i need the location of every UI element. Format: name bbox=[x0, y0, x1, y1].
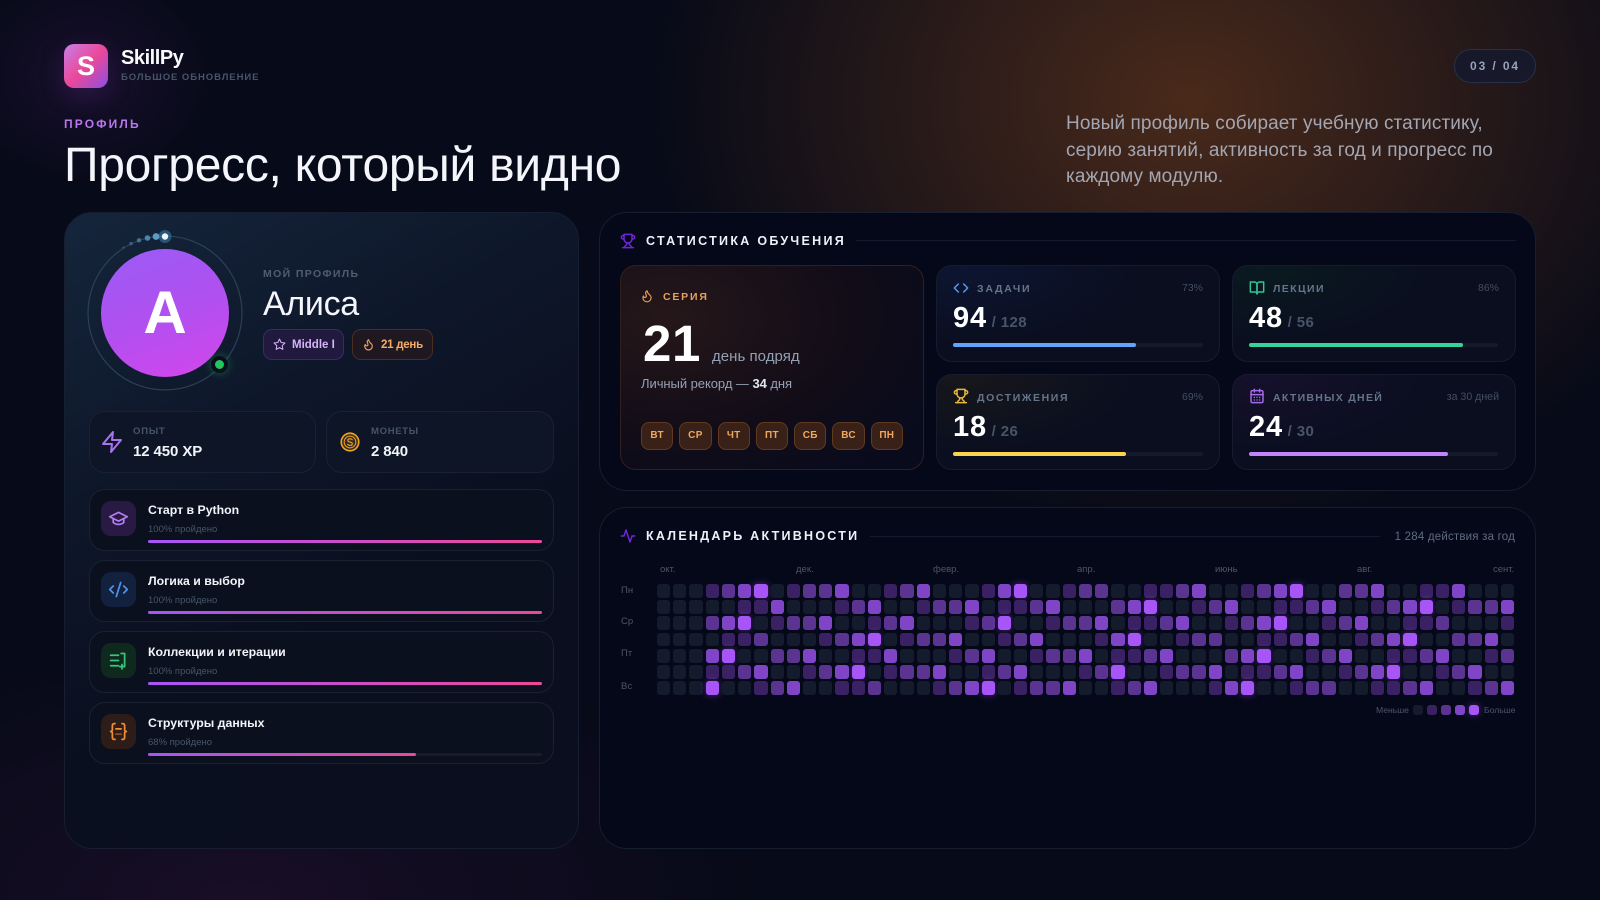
orbit ring and dots bbox=[88, 230, 242, 391]
status dot bbox=[211, 356, 228, 373]
weekday labels: Пн bbox=[621, 585, 633, 596]
icon: bolt bbox=[102, 431, 122, 453]
panel: activity calendar bbox=[599, 507, 1536, 849]
icon: trophy bbox=[954, 388, 968, 404]
logo bbox=[60, 44, 259, 100]
module title: Коллекции и итерации bbox=[148, 645, 286, 659]
badge: level bbox=[263, 329, 344, 360]
description: каждому модулю. bbox=[1066, 166, 1223, 187]
lectures value: 48 / 56 bbox=[1249, 302, 1314, 334]
month labels: дек. bbox=[796, 564, 814, 575]
day chips: ПН bbox=[879, 430, 894, 441]
icon: coin bbox=[340, 432, 360, 452]
section heading: КАЛЕНДАРЬ АКТИВНОСТИ bbox=[646, 529, 859, 543]
icon: activity bbox=[620, 529, 636, 543]
module progress text: 100% пройдено bbox=[148, 524, 217, 535]
experience value: 12 450 XP bbox=[133, 443, 202, 460]
icon: logo mark bbox=[64, 44, 108, 88]
page counter bbox=[1454, 49, 1536, 83]
stat: coins bbox=[326, 411, 554, 473]
month labels: июнь bbox=[1215, 564, 1238, 575]
personal record: Личный рекорд — 34 дня bbox=[641, 376, 792, 391]
page counter: 03 / 04 bbox=[1470, 59, 1520, 73]
module: data structures bbox=[89, 702, 554, 764]
icon: star bbox=[274, 338, 286, 350]
description bbox=[1066, 113, 1493, 187]
module title: Структуры данных bbox=[148, 716, 265, 730]
heatmap legend: Меньше bbox=[1376, 705, 1409, 715]
module progress bar bbox=[148, 753, 542, 756]
month labels: февр. bbox=[933, 564, 959, 575]
icon: book bbox=[1250, 281, 1264, 295]
active days label: АКТИВНЫХ ДНЕЙ bbox=[1273, 392, 1383, 404]
icon: calendar bbox=[1250, 388, 1264, 404]
month labels: сент. bbox=[1493, 564, 1514, 575]
tasks percent: 73% bbox=[1182, 282, 1203, 294]
achievements label: ДОСТИЖЕНИЯ bbox=[977, 392, 1069, 404]
card: lectures bbox=[1232, 265, 1516, 362]
icon: flame bbox=[364, 339, 373, 350]
streak label: СЕРИЯ bbox=[663, 291, 709, 303]
brand subtitle: БОЛЬШОЕ ОБНОВЛЕНИЕ bbox=[121, 72, 259, 83]
lectures bar bbox=[1249, 343, 1498, 347]
module progress text: 68% пройдено bbox=[148, 737, 212, 748]
card: tasks bbox=[936, 265, 1220, 362]
month labels: окт. bbox=[660, 564, 675, 575]
panel: learning statistics bbox=[599, 212, 1536, 491]
heatmap legend bbox=[1376, 700, 1515, 720]
module: collections bbox=[89, 631, 554, 693]
day chips: ЧТ bbox=[727, 430, 741, 441]
description: серию занятий, активность за год и прогресс по bbox=[1066, 140, 1493, 161]
active days bar bbox=[1249, 452, 1498, 456]
lectures percent: 86% bbox=[1478, 282, 1499, 294]
module progress text: 100% пройдено bbox=[148, 595, 217, 606]
icon: graduation cap bbox=[101, 501, 136, 536]
module progress bar bbox=[148, 682, 542, 685]
day chips bbox=[641, 422, 903, 450]
tasks bar bbox=[953, 343, 1203, 347]
panel: profile bbox=[64, 212, 579, 849]
card: streak bbox=[620, 265, 924, 470]
eyebrow: ПРОФИЛЬ bbox=[64, 117, 141, 131]
brand name: SkillPy bbox=[121, 47, 183, 69]
day chips: ВТ bbox=[650, 430, 664, 441]
experience label: ОПЫТ bbox=[133, 426, 166, 437]
streak number: 21 bbox=[643, 315, 701, 372]
module progress text: 100% пройдено bbox=[148, 666, 217, 677]
avatar circle bbox=[101, 249, 229, 377]
coins label: МОНЕТЫ bbox=[371, 426, 419, 437]
module title: Старт в Python bbox=[148, 503, 239, 517]
card: achievements bbox=[936, 374, 1220, 470]
month labels bbox=[660, 564, 1514, 575]
coins value: 2 840 bbox=[371, 443, 408, 460]
icon: braces bbox=[101, 714, 136, 749]
tasks value: 94 / 128 bbox=[953, 302, 1027, 334]
stat: experience bbox=[89, 411, 316, 473]
month labels: авг. bbox=[1357, 564, 1372, 575]
achievements percent: 69% bbox=[1182, 391, 1203, 403]
heatmap legend: Больше bbox=[1484, 705, 1515, 715]
badge: streak bbox=[352, 329, 433, 360]
title: Прогресс, который видно bbox=[64, 139, 621, 192]
card: active days bbox=[1232, 374, 1516, 470]
level text: Middle I bbox=[292, 339, 335, 351]
weekday labels: Ср bbox=[621, 616, 633, 627]
day chips: СБ bbox=[803, 430, 818, 441]
achievements bar bbox=[953, 452, 1203, 456]
streak text: 21 день bbox=[381, 339, 423, 351]
activity heatmap bbox=[657, 579, 1514, 700]
yearly actions count: 1 284 действия за год bbox=[1395, 531, 1515, 543]
day chips: СР bbox=[688, 430, 703, 441]
day chips: ВС bbox=[841, 430, 856, 441]
day chips: ПТ bbox=[765, 430, 779, 441]
module title: Логика и выбор bbox=[148, 574, 245, 588]
tasks label: ЗАДАЧИ bbox=[977, 283, 1031, 295]
month labels: апр. bbox=[1077, 564, 1095, 575]
icon: trophy bbox=[620, 234, 636, 248]
weekday labels: Пт bbox=[621, 648, 632, 659]
icon: code bbox=[954, 283, 968, 293]
avatar with orbit ring bbox=[88, 230, 242, 391]
icon: flame bbox=[642, 290, 652, 302]
description: Новый профиль собирает учебную статистику, bbox=[1066, 113, 1483, 134]
weekday labels bbox=[621, 585, 633, 692]
module progress bar bbox=[148, 540, 542, 543]
streak caption: день подряд bbox=[712, 348, 800, 365]
avatar circle: А bbox=[143, 279, 187, 346]
active days value: 24 / 30 bbox=[1249, 411, 1314, 443]
weekday labels: Вс bbox=[621, 681, 632, 692]
lectures label: ЛЕКЦИИ bbox=[1273, 283, 1325, 295]
icon: list loop bbox=[101, 643, 136, 678]
user name: Алиса bbox=[263, 285, 359, 323]
module progress bar bbox=[148, 611, 542, 614]
active days note: за 30 дней bbox=[1447, 391, 1499, 403]
module: logic bbox=[89, 560, 554, 622]
icon: code bbox=[101, 572, 136, 607]
module: start in python bbox=[89, 489, 554, 551]
icon: logo mark: S bbox=[77, 51, 95, 81]
section heading: СТАТИСТИКА ОБУЧЕНИЯ bbox=[646, 234, 846, 248]
achievements value: 18 / 26 bbox=[953, 411, 1018, 443]
profile label: МОЙ ПРОФИЛЬ bbox=[263, 268, 359, 280]
